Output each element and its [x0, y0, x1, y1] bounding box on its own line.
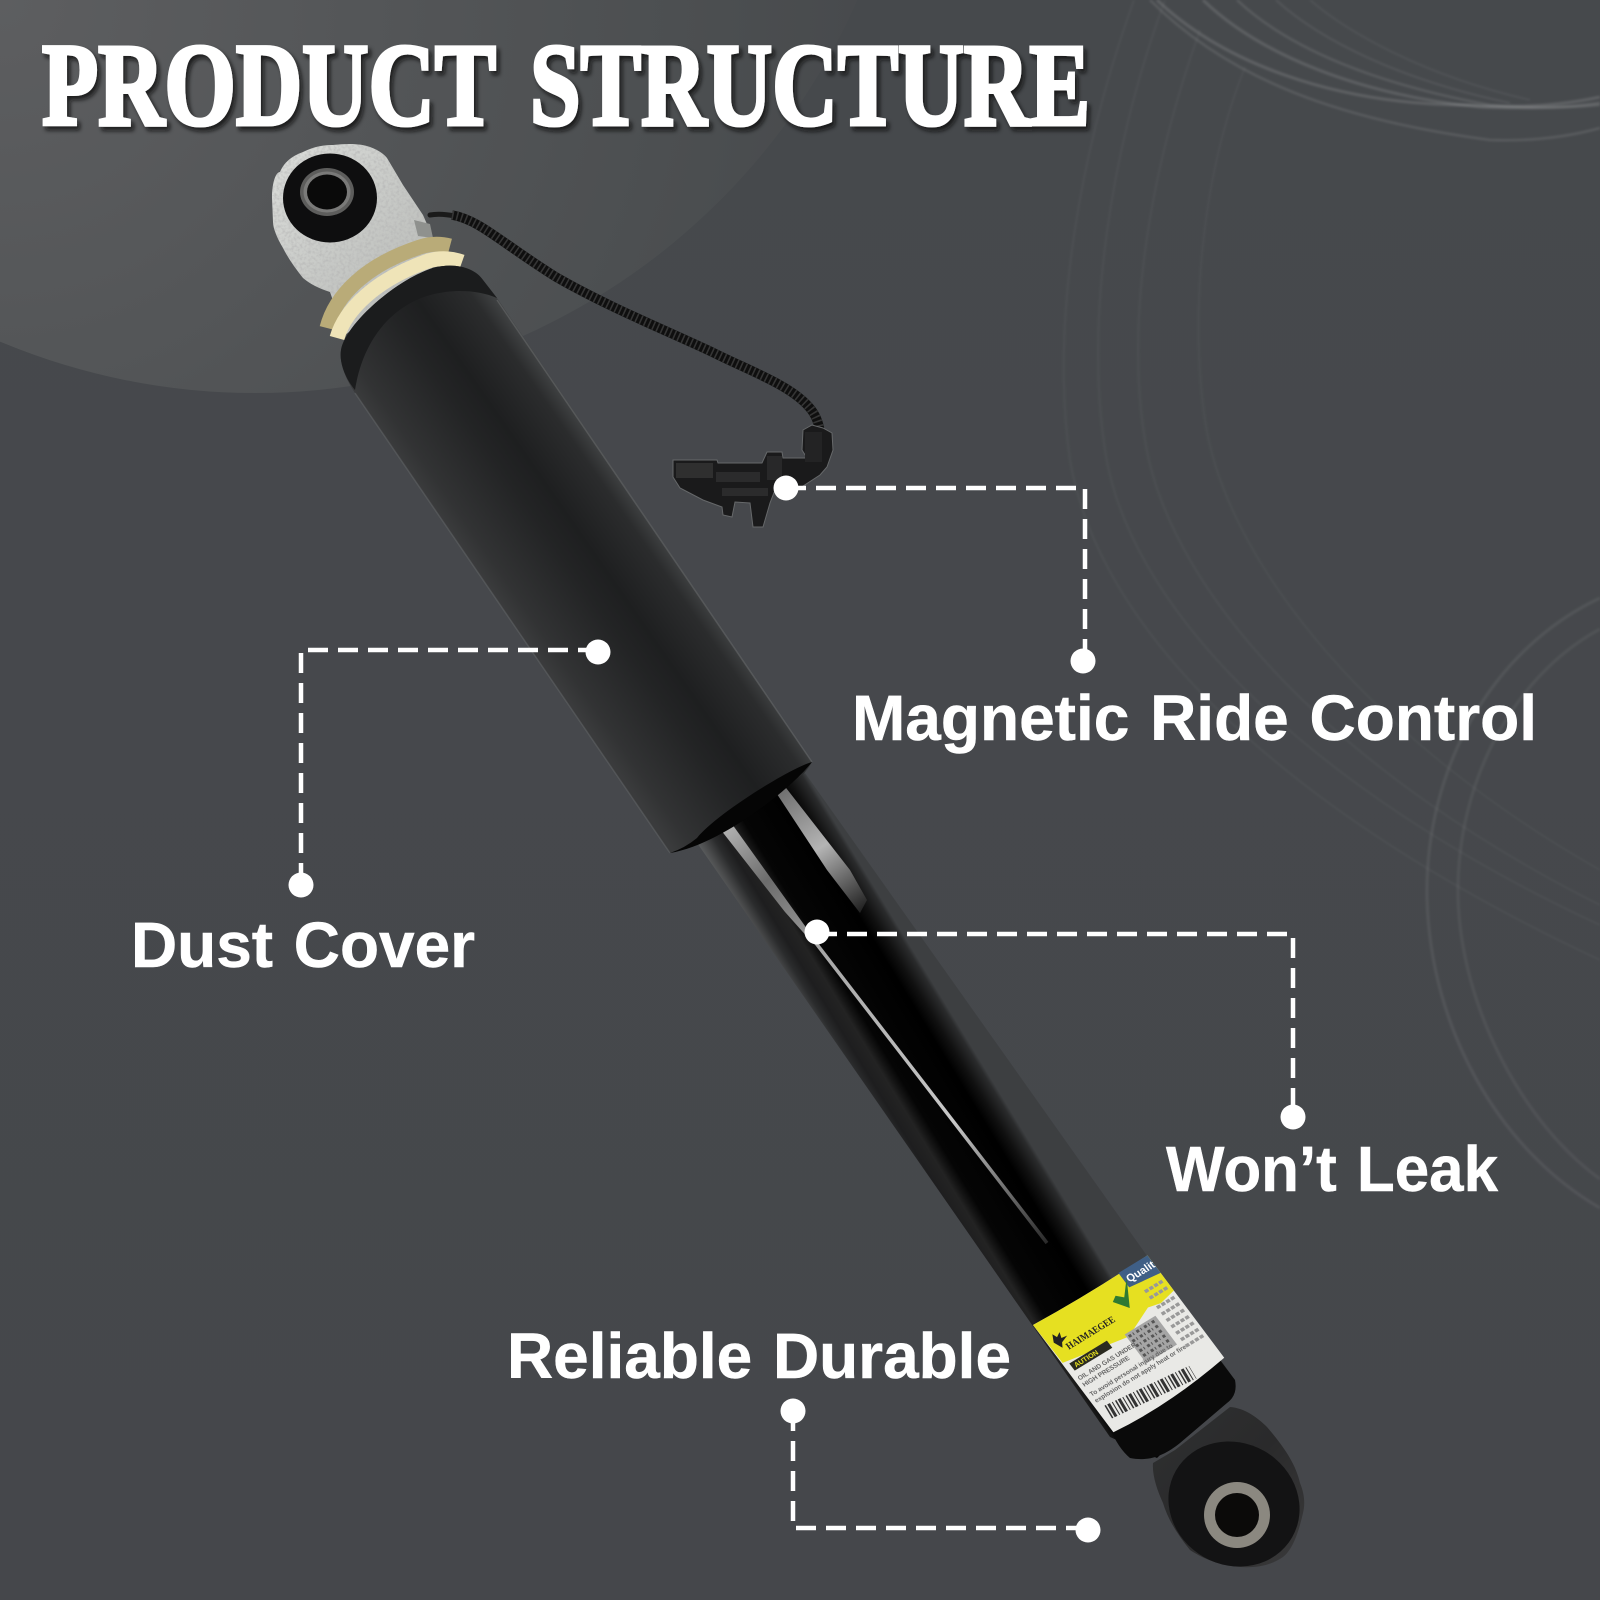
- callout: magnetic ride control: Magnetic Ride Control: [852, 682, 1537, 754]
- decorative arcs: top right and right side: [1064, 0, 1600, 1208]
- warning text: explosion do not apply heat or fire: [1093, 1344, 1188, 1405]
- dust cover lower opening: [670, 762, 812, 853]
- quality badge: [1118, 1255, 1161, 1291]
- callout: magnetic ride control: [774, 476, 1537, 754]
- warning text: HIGH PRESSURE: [1081, 1355, 1132, 1389]
- brass rings: [327, 244, 462, 338]
- brand logo: [1049, 1303, 1118, 1356]
- lower eye housing: [1145, 1407, 1323, 1590]
- barcode: [1108, 1364, 1193, 1420]
- callout: reliable durable: [507, 1320, 1100, 1542]
- shock absorber product: [272, 144, 1323, 1590]
- warning text: [1077, 1321, 1188, 1405]
- title: PRODUCT: [42, 20, 496, 150]
- callout: dust cover: Dust Cover: [131, 909, 475, 981]
- silver upper mount: [272, 144, 445, 335]
- sensor cable: [430, 214, 820, 432]
- caution strip: AUTION: [1073, 1350, 1100, 1369]
- sensor connector: [673, 425, 833, 527]
- dust cover: [341, 266, 812, 853]
- warning text: OIL AND GAS UNDER: [1077, 1342, 1138, 1382]
- warning text: To avoid personal injury due to: [1089, 1343, 1175, 1398]
- QR code: [1125, 1316, 1177, 1363]
- title: STRUCTURE: [530, 20, 1090, 150]
- callout: won't leak: [804, 920, 1498, 1205]
- callout: dust cover: [131, 640, 610, 981]
- check mark: [1104, 1277, 1143, 1313]
- rubber bushing, upper: [283, 154, 377, 242]
- title: [42, 20, 1090, 150]
- caution strip: [1069, 1341, 1112, 1371]
- callout: reliable durable: Reliable Durable: [507, 1320, 1011, 1392]
- quality badge: Qualit: [1124, 1259, 1158, 1285]
- right text column: [1145, 1280, 1205, 1346]
- brand logo: HAIMAEGEE: [1064, 1315, 1118, 1352]
- product label: [1033, 1255, 1229, 1434]
- steel tube: [695, 773, 1235, 1458]
- lower tube end: [1110, 1360, 1236, 1459]
- callout: won't leak: Won’t Leak: [1166, 1133, 1498, 1205]
